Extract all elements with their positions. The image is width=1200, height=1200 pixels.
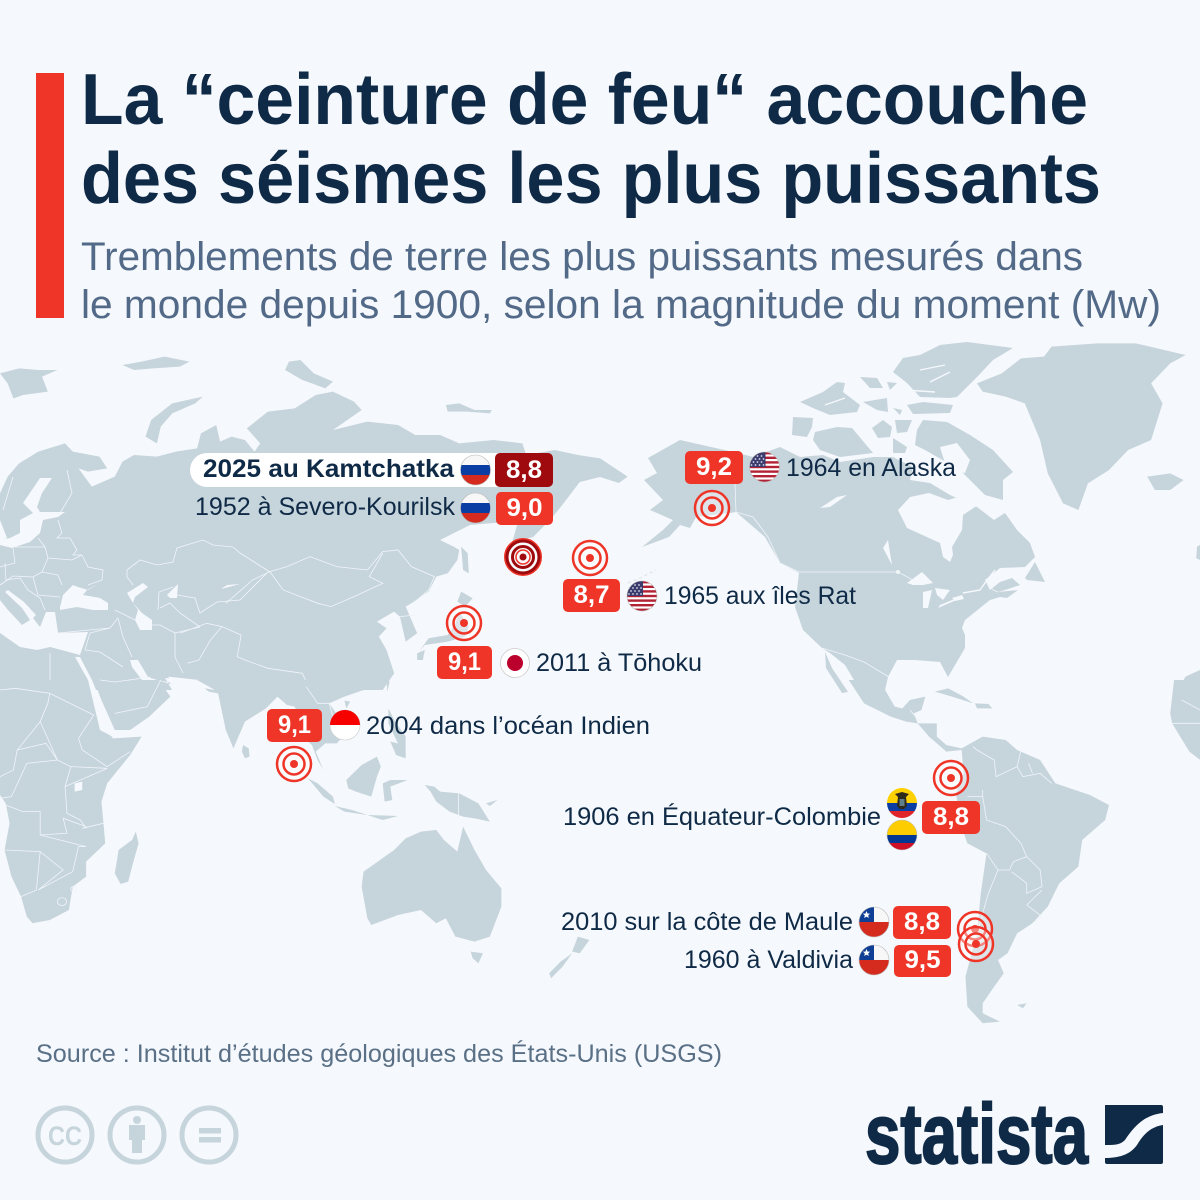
label: 2004 dans l'océan Indien xyxy=(267,709,650,742)
marker: océan Indien 2004 xyxy=(277,747,311,781)
title xyxy=(81,60,1101,219)
icon: creative commons xyxy=(38,1108,92,1162)
label: 1906 en Équateur-Colombie: 8,8 xyxy=(933,803,969,831)
marker: îles Rat 1965 xyxy=(573,541,607,575)
marker: Maule 2010 xyxy=(958,912,992,946)
marker: Tōhoku 2011 xyxy=(447,606,481,640)
world map xyxy=(0,342,1200,1023)
icon: flag Colombia xyxy=(887,820,917,850)
icon: attribution xyxy=(110,1108,164,1162)
map: Greenland and Iceland xyxy=(977,343,1200,690)
map: seas and borders of Europe and the Middle East xyxy=(0,470,270,738)
label: 1960 à Valdivia xyxy=(684,945,951,977)
label: 2010 sur la côte de Maule xyxy=(561,906,951,939)
map: Eurasia north xyxy=(0,357,628,690)
label: 2011 à Tōhoku: 9,1 xyxy=(448,648,481,676)
label: 2025 au Kamtchatka: 8,8 xyxy=(506,456,542,484)
label: 2010 sur la côte de Maule: 2010 sur la côte de Maule xyxy=(561,908,853,936)
marker: Kamchatka 2025 and Severo-Kourilsk 1952 xyxy=(505,539,541,575)
marker: Valdivia 1960 xyxy=(959,927,993,961)
map: Hudson Bay and lakes xyxy=(820,443,990,608)
label: 1952 à Severo-Kourilsk: 9,0 xyxy=(506,494,542,522)
map: Africa, South Asia and Oceania xyxy=(0,680,589,978)
label: 1965 aux îles Rat xyxy=(563,579,856,612)
statista logo icon xyxy=(1105,1105,1163,1164)
label: 1906 en Équateur-Colombie: 1906 en Équateur-Colombie xyxy=(563,802,881,831)
label: 1965 aux îles Rat: 1965 aux îles Rat xyxy=(664,582,856,610)
map: Aleutian islands xyxy=(628,570,656,583)
label: 1960 à Valdivia: 9,5 xyxy=(904,946,941,974)
label: 2010 sur la côte de Maule: 8,8 xyxy=(904,908,940,936)
source: Source : Institut d’études géologiques des États-Unis (USGS) xyxy=(36,1039,722,1068)
label: 2004 dans l'océan Indien: 2004 dans l’océan Indien xyxy=(366,712,650,740)
icon: creative commons: CC xyxy=(48,1121,82,1151)
label: 2025 au Kamtchatka xyxy=(190,453,553,487)
red accent bar xyxy=(36,73,64,318)
label: 1965 aux îles Rat: 8,7 xyxy=(574,581,610,609)
subtitle: Tremblements de terre les plus puissants mesurés dans xyxy=(81,235,1083,279)
label: 2011 à Tōhoku xyxy=(437,646,702,679)
subtitle xyxy=(81,235,1161,327)
label: 1964 en Alaska xyxy=(685,451,956,484)
label: 2011 à Tōhoku: 2011 à Tōhoku xyxy=(536,649,702,677)
map: North America and Canadian Arctic xyxy=(642,342,1045,693)
title: des séismes les plus puissants xyxy=(81,139,1101,219)
label: 2004 dans l'océan Indien: 9,1 xyxy=(278,711,311,739)
label: 1960 à Valdivia: 1960 à Valdivia xyxy=(684,946,853,974)
map: Central and South America, West Africa xyxy=(849,680,1200,1023)
icon: no derivatives xyxy=(182,1108,236,1162)
marker: Équateur-Colombie 1906 xyxy=(934,761,968,795)
label: 1952 à Severo-Kourilsk: 1952 à Severo-Kourilsk xyxy=(195,493,455,521)
subtitle: le monde depuis 1900, selon la magnitude du moment (Mw) xyxy=(81,283,1161,327)
statista wordmark: statista xyxy=(865,1087,1089,1181)
label: 1906 en Équateur-Colombie xyxy=(563,788,980,850)
label: 1964 en Alaska: 9,2 xyxy=(696,453,732,481)
label: 2025 au Kamtchatka: 2025 au Kamtchatka xyxy=(203,455,455,483)
label: 1952 à Severo-Kourilsk xyxy=(195,492,553,525)
title: La “ceinture de feu“ accouche xyxy=(81,60,1088,140)
label: 1964 en Alaska: 1964 en Alaska xyxy=(786,454,956,482)
icon: flag Ecuador xyxy=(887,788,917,818)
marker: Alaska 1964 xyxy=(695,491,729,525)
